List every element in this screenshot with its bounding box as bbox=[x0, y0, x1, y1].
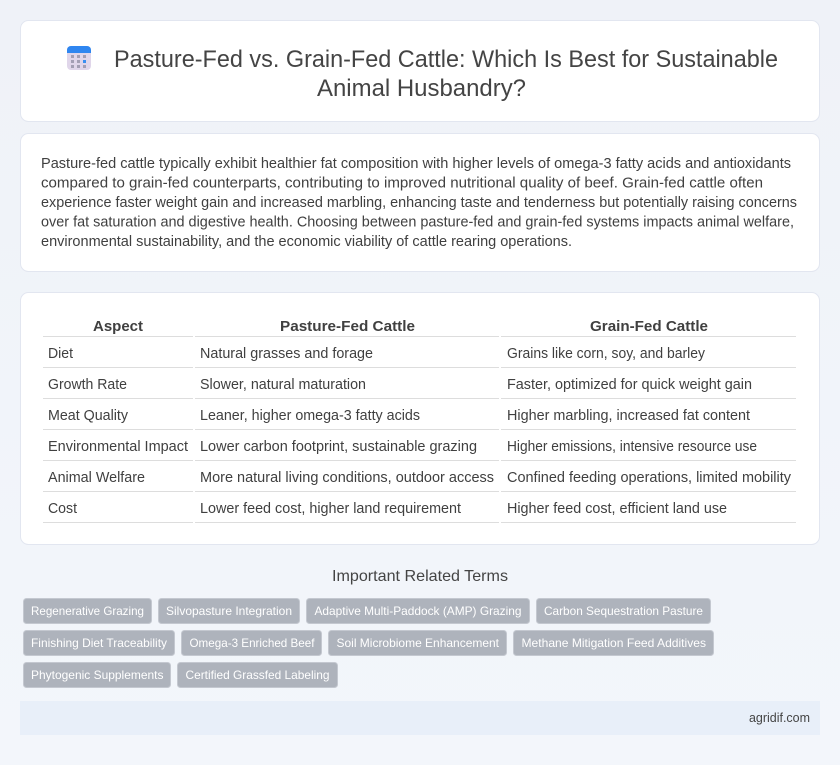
tag: Methane Mitigation Feed Additives bbox=[522, 636, 706, 650]
tag: Carbon Sequestration Pasture bbox=[544, 604, 703, 618]
row: animal welfare: Confined feeding operations, limited mobility bbox=[507, 470, 792, 486]
row: animal welfare bbox=[48, 470, 792, 486]
tag bbox=[24, 598, 152, 624]
row: environmental impact: Lower carbon footprint, sustainable grazing bbox=[200, 439, 477, 455]
row: environmental impact bbox=[48, 439, 757, 455]
row: animal welfare: Animal Welfare bbox=[48, 470, 145, 486]
row: environmental impact: Higher emissions, intensive resource use bbox=[507, 439, 757, 455]
tag bbox=[158, 598, 300, 624]
panel: summary bbox=[20, 134, 820, 272]
row: cost bbox=[48, 501, 727, 517]
tag: Omega-3 Enriched Beef bbox=[190, 636, 315, 650]
row: meat quality: Higher marbling, increased fat content bbox=[507, 408, 750, 424]
footer: agridif.com bbox=[749, 710, 810, 725]
row: diet: Diet bbox=[48, 346, 73, 362]
table rules bbox=[43, 336, 796, 523]
summary text: environmental sustainability, and the economic viability of cattle rearing operations. bbox=[41, 234, 572, 250]
table header: Pasture-Fed Cattle bbox=[280, 319, 415, 335]
row: growth rate bbox=[48, 377, 752, 393]
panel: related term tags bbox=[24, 598, 714, 688]
summary text bbox=[41, 156, 797, 250]
tag: Finishing Diet Traceability bbox=[31, 636, 167, 650]
row: diet: Natural grasses and forage bbox=[200, 346, 373, 362]
table header bbox=[93, 319, 708, 335]
tag bbox=[178, 662, 338, 688]
row: growth rate: Faster, optimized for quick weight gain bbox=[507, 377, 752, 393]
footer bbox=[20, 701, 820, 735]
table header: Grain-Fed Cattle bbox=[590, 319, 708, 335]
tag: Phytogenic Supplements bbox=[31, 668, 164, 682]
tag bbox=[514, 630, 714, 656]
row: animal welfare: More natural living conditions, outdoor access bbox=[200, 470, 494, 486]
tag bbox=[182, 630, 322, 656]
title bbox=[114, 46, 778, 102]
row: meat quality: Meat Quality bbox=[48, 408, 129, 424]
summary text: compared to grain-fed counterparts, contributing to improved nutritional quality of beef. Grain-fed cattle often bbox=[41, 176, 763, 192]
row: meat quality: Leaner, higher omega-3 fatty acids bbox=[200, 408, 420, 424]
tag bbox=[328, 630, 506, 656]
title: Animal Husbandry? bbox=[317, 75, 526, 102]
tag bbox=[306, 598, 530, 624]
row: meat quality bbox=[48, 408, 750, 424]
panel: title card bbox=[20, 20, 820, 122]
tag: Certified Grassfed Labeling bbox=[186, 668, 330, 682]
heading: important related terms: Important Related Terms bbox=[332, 568, 508, 585]
title: Pasture-Fed vs. Grain-Fed Cattle: Which Is Best for Sustainable bbox=[114, 46, 778, 73]
summary text: Pasture-fed cattle typically exhibit healthier fat composition with higher levels of omega-3 fatty acids and antioxidants bbox=[41, 156, 791, 172]
tag bbox=[24, 662, 170, 688]
row: cost: Cost bbox=[48, 501, 77, 517]
tag bbox=[536, 598, 710, 624]
row: growth rate: Growth Rate bbox=[48, 377, 127, 393]
tag: Silvopasture Integration bbox=[166, 604, 292, 618]
tag bbox=[24, 630, 174, 656]
row: growth rate: Slower, natural maturation bbox=[200, 377, 366, 393]
tag: Adaptive Multi-Paddock (AMP) Grazing bbox=[314, 604, 522, 618]
panel: comparison table bbox=[20, 292, 820, 544]
row: cost: Higher feed cost, efficient land use bbox=[507, 501, 727, 517]
tag: Regenerative Grazing bbox=[31, 604, 144, 618]
row: diet bbox=[48, 346, 706, 362]
row: diet: Grains like corn, soy, and barley bbox=[507, 346, 706, 362]
summary text: experience faster weight gain and increased marbling, enhancing taste and tenderness but potentially raising concerns bbox=[41, 195, 797, 211]
row: cost: Lower feed cost, higher land requirement bbox=[200, 501, 461, 517]
table header: Aspect bbox=[93, 319, 143, 335]
icon: calendar bbox=[67, 46, 91, 70]
row: environmental impact: Environmental Impact bbox=[48, 439, 188, 455]
summary text: over fat saturation and digestive health. Choosing between pasture-fed and grain-fed systems impacts animal welfare, bbox=[41, 214, 794, 230]
tag: Soil Microbiome Enhancement bbox=[336, 636, 500, 650]
